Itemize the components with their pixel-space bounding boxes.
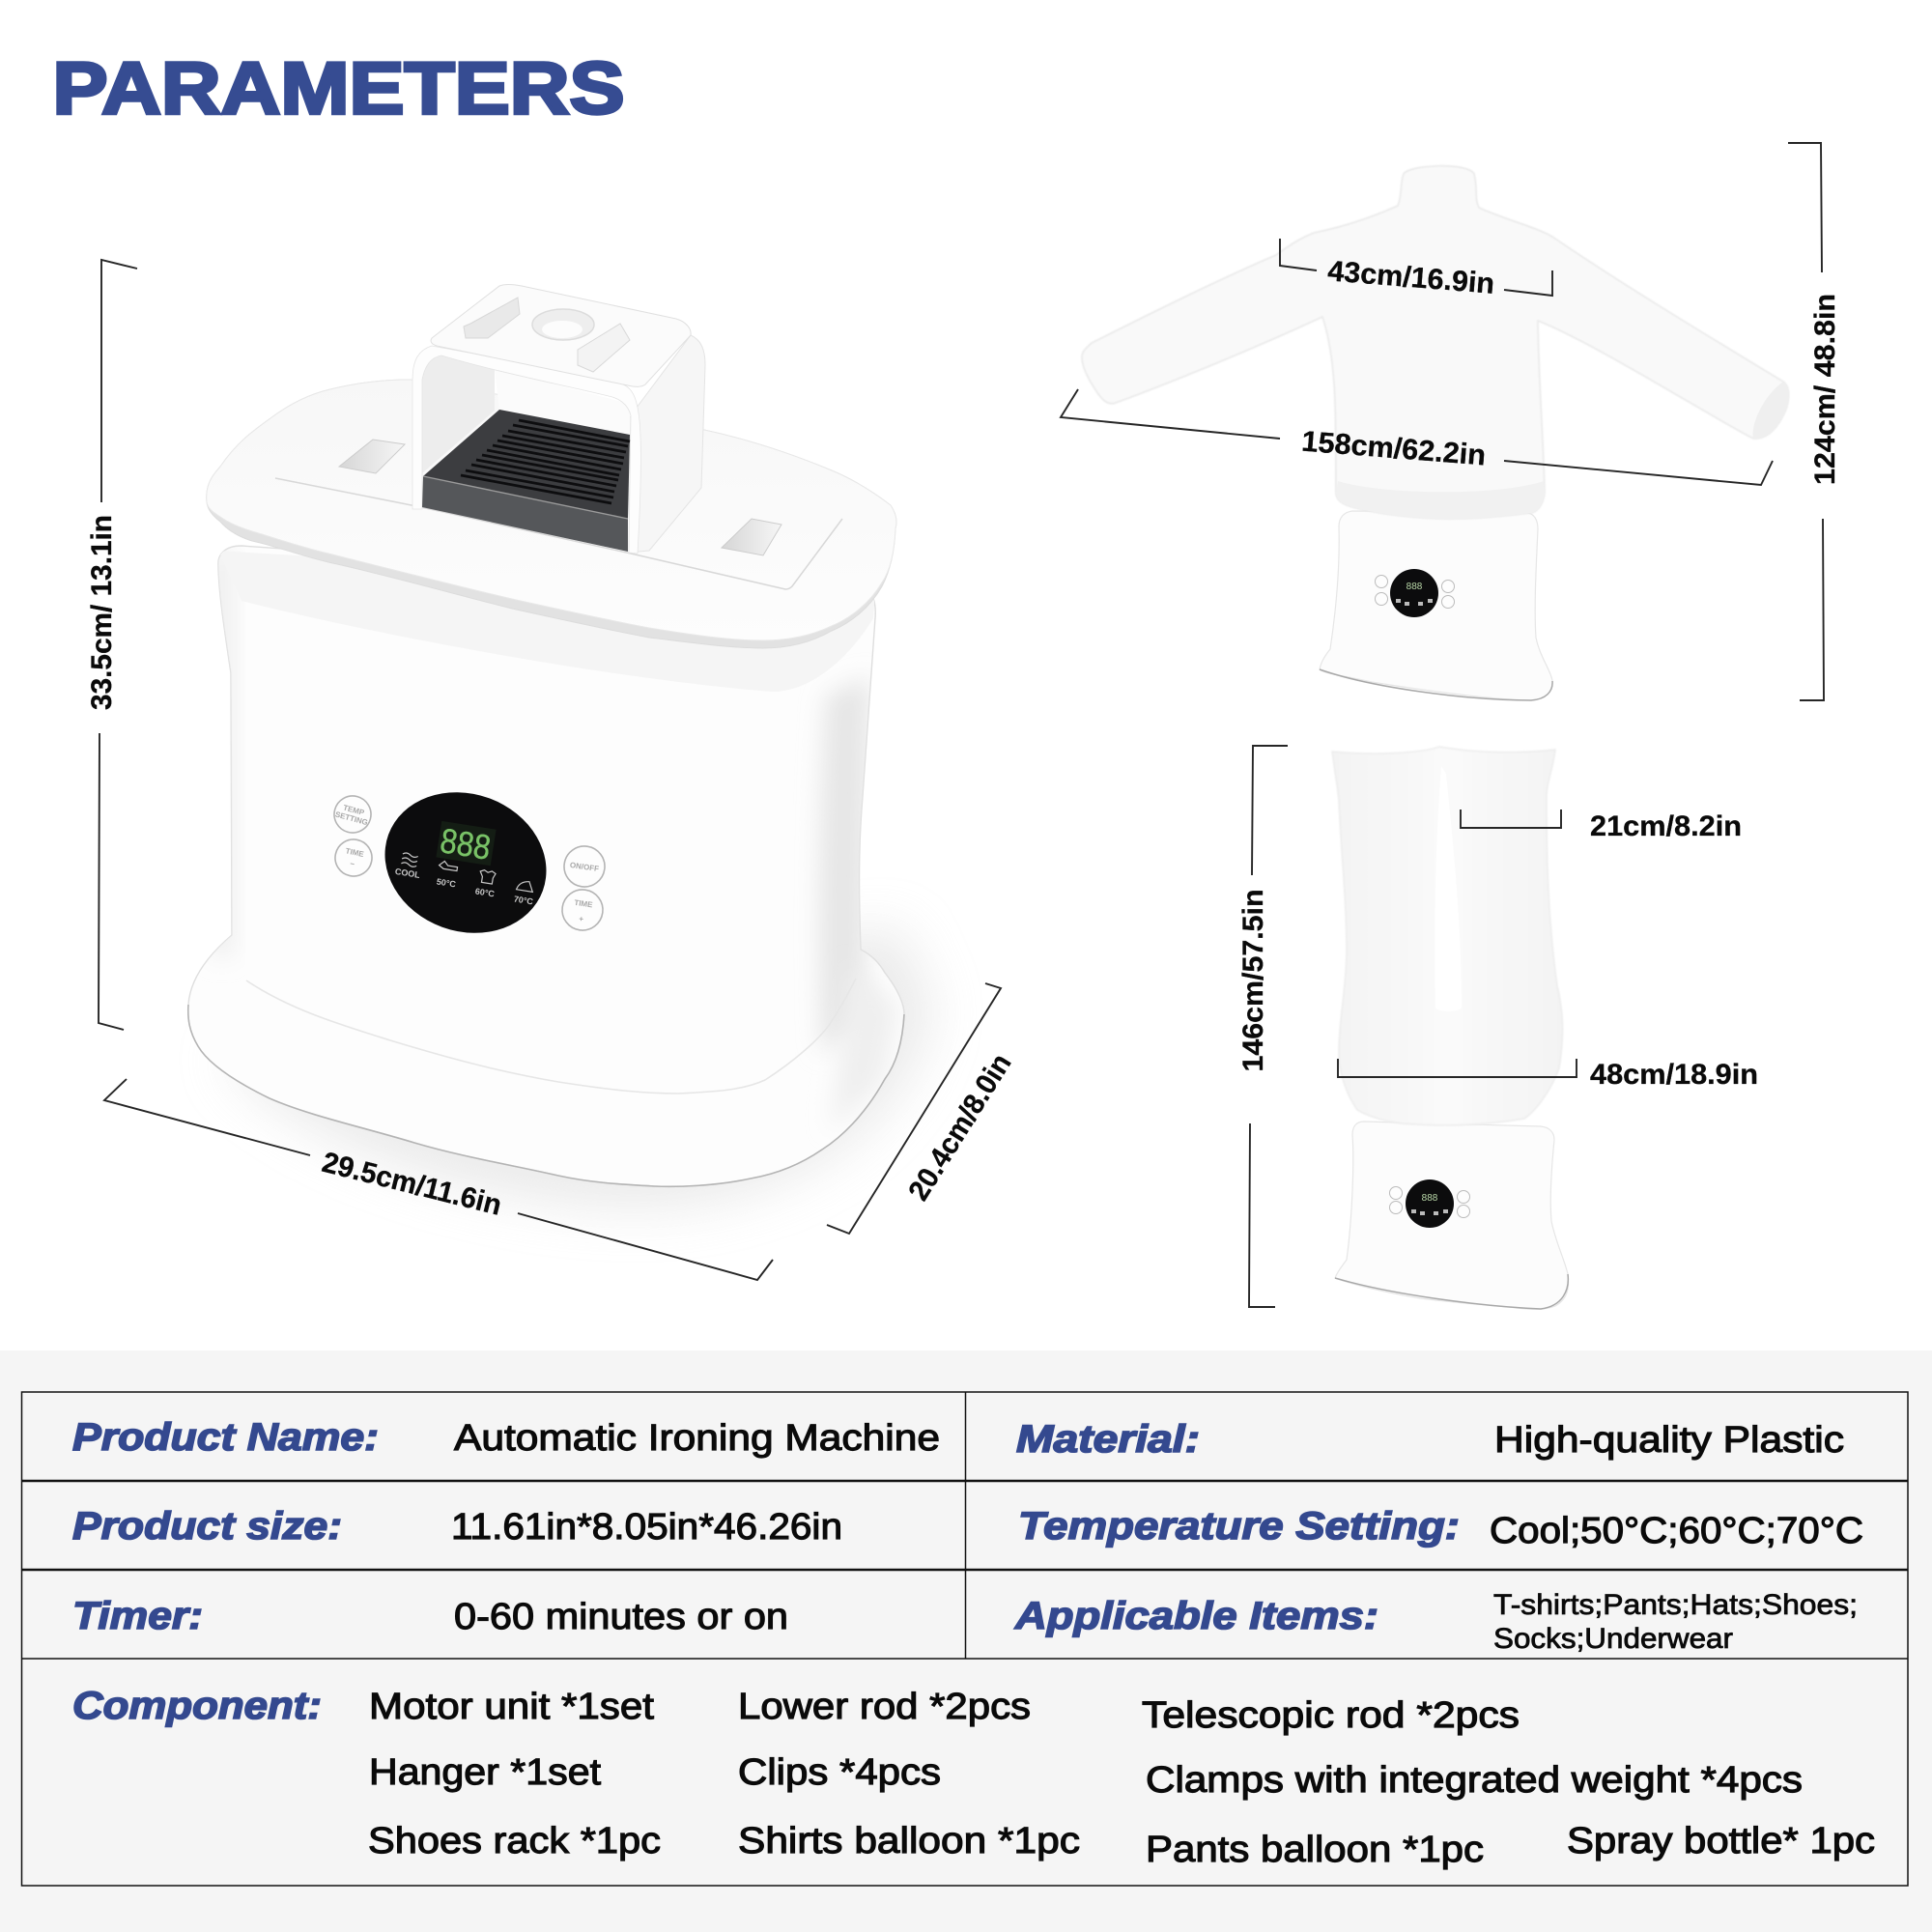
row: timer: Timer:: [72, 1595, 203, 1637]
dimension: leg width: 21cm/8.2in: [1590, 810, 1742, 842]
dimension: machine height: 33.5cm/ 13.1in: [86, 515, 118, 710]
row: timer: [72, 1595, 788, 1637]
pants balloon: [1332, 747, 1563, 1125]
dimension: arm span: 158cm/62.2in: [1300, 426, 1487, 471]
row: component: Shoes rack *1pc: [368, 1821, 661, 1861]
LED readout: 888: [438, 820, 494, 867]
row: product size: [72, 1505, 842, 1548]
table grid: [21, 1392, 1908, 1886]
row: component: Telescopic rod *2pcs: [1142, 1695, 1520, 1736]
control panel: [330, 770, 608, 955]
machine body: [188, 546, 904, 1186]
shoe rack holder: [412, 284, 705, 554]
dimension: leg width: [1461, 810, 1742, 842]
label: 60C: [474, 869, 498, 899]
row: product size: Product size:: [72, 1505, 342, 1548]
row: material: [1016, 1418, 1844, 1461]
row: material: Material:: [1016, 1418, 1200, 1461]
dimension: pants height: [1237, 746, 1288, 1307]
row: applicable items: [1014, 1589, 1858, 1655]
lid slot: left: [339, 440, 405, 473]
row: component: Component:: [72, 1685, 322, 1727]
row: component: Spray bottle* 1pc: [1567, 1821, 1875, 1861]
shirt base bottom rim: [1320, 669, 1552, 700]
holder opening wall: [422, 355, 495, 473]
shirt balloon: [1082, 166, 1789, 519]
pants base readout: 888: [1422, 1193, 1438, 1204]
button: temp setting: TEMP: [342, 803, 366, 817]
product: shirt balloon on base: [1082, 166, 1789, 700]
button: temp setting: [330, 792, 375, 837]
label: 60C: 60°C: [474, 886, 496, 899]
holder right face: [629, 335, 705, 553]
shirt base: [1320, 511, 1552, 700]
dimension: machine depth: 20.4cm/8.0in: [902, 1048, 1018, 1207]
plate clip: left: [464, 298, 520, 338]
row: component: Pants balloon *1pc: [1146, 1830, 1484, 1870]
button: on off: [561, 843, 608, 890]
holder back opening: [495, 369, 630, 437]
dimension: shoulder width: 43cm/16.9in: [1326, 255, 1495, 300]
holder front arch band: [412, 346, 641, 554]
panel display oval: [365, 770, 566, 955]
pants base temperature marks: [1411, 1211, 1448, 1213]
row: component: Clips *4pcs: [738, 1752, 941, 1793]
shirt base readout: 888: [1406, 582, 1423, 592]
machine base fold line: [246, 979, 856, 1094]
row: material: High-quality Plastic: [1494, 1420, 1844, 1461]
machine lid: [207, 380, 896, 648]
row: temperature setting: Cool;50°C;60°C;70°C: [1490, 1511, 1863, 1551]
dark tray: [422, 410, 630, 552]
pants base buttons: [1389, 1186, 1470, 1217]
plate ring: [532, 309, 594, 340]
row: temperature setting: Temperature Setting:: [1018, 1505, 1460, 1548]
row: product name: Product Name:: [72, 1416, 379, 1459]
button: on off: ON/OFF: [569, 861, 600, 873]
dimension: shirt height: [1788, 143, 1841, 700]
button: time plus: +: [579, 915, 584, 923]
dimension: shoulder width: [1280, 239, 1552, 300]
button: time minus: TIME: [345, 846, 365, 859]
label: 50C: [436, 861, 460, 890]
pants base: [1335, 1122, 1569, 1309]
row: applicable items: Applicable Items:: [1014, 1595, 1378, 1637]
product: compact machine base with shoe rack: [188, 284, 932, 1208]
row: product name: Automatic Ironing Machine: [454, 1418, 940, 1459]
button: time plus: TIME: [574, 898, 594, 909]
machine soft shadow: [222, 927, 932, 1208]
title: PARAMETERS: [52, 48, 624, 129]
label: cool: COOL: [394, 867, 421, 880]
plate ring hole: [542, 321, 582, 338]
row: timer: 0-60 minutes or on: [454, 1597, 788, 1637]
row: component: Motor unit *1set: [369, 1687, 654, 1727]
dimension: machine width: 29.5cm/11.6in: [319, 1147, 504, 1222]
button: time minus: [331, 836, 376, 880]
panel: specifications: [0, 1350, 1932, 1932]
row: component: Hanger *1set: [369, 1752, 601, 1793]
label: 50C: 50°C: [436, 876, 457, 890]
label: 70C: 70°C: [513, 894, 534, 907]
dimension: arm span: [1061, 389, 1773, 485]
pants base bottom rim: [1335, 1274, 1568, 1309]
dimension: machine depth: [827, 983, 1018, 1234]
machine body shading: [211, 551, 898, 1130]
label: cool: [394, 852, 423, 880]
lid slot: right: [722, 519, 781, 555]
row: component: [72, 1685, 1875, 1870]
panel background: [0, 1350, 1932, 1932]
button: time plus: [559, 887, 606, 933]
pants base display: [1406, 1179, 1454, 1228]
row: product name: [72, 1416, 940, 1459]
dimension: pants width: [1338, 1059, 1758, 1091]
button: temp setting: SETTING: [334, 810, 369, 827]
shirt base temperature marks: [1396, 601, 1433, 604]
shirt sleeve end shading: [1753, 382, 1789, 439]
label: 70C: [513, 880, 536, 907]
plate clip: right: [578, 324, 630, 372]
button: time minus: −: [349, 859, 355, 868]
shirt gather: [1336, 481, 1545, 519]
lid inset outline: [275, 478, 842, 589]
machine base outline: [188, 1005, 904, 1186]
holder top plate: [431, 284, 691, 386]
row: applicable items: T-shirts;Pants;Hats;Shoes;: [1493, 1589, 1858, 1621]
dimension: machine height: [86, 260, 137, 1030]
row: component: Shirts balloon *1pc: [738, 1821, 1080, 1861]
dimension: pants width: 48cm/18.9in: [1590, 1059, 1758, 1091]
row: component: Clamps with integrated weight *4pcs: [1146, 1760, 1803, 1801]
dimension: machine width: [104, 1079, 773, 1280]
row: temperature setting: [1018, 1505, 1863, 1551]
row: product size: 11.61in*8.05in*46.26in: [451, 1507, 842, 1548]
dimension: pants height: 146cm/57.5in: [1237, 889, 1269, 1072]
shirt base display: [1390, 569, 1438, 617]
row: applicable items: Socks;Underwear: [1493, 1623, 1733, 1655]
product: pants balloon on base: [1332, 747, 1569, 1309]
shirt base buttons: [1376, 576, 1455, 609]
dimension: shirt height: 124cm/ 48.8in: [1809, 294, 1841, 485]
row: component: Lower rod *2pcs: [738, 1687, 1031, 1727]
pants slit: [1435, 766, 1462, 1011]
